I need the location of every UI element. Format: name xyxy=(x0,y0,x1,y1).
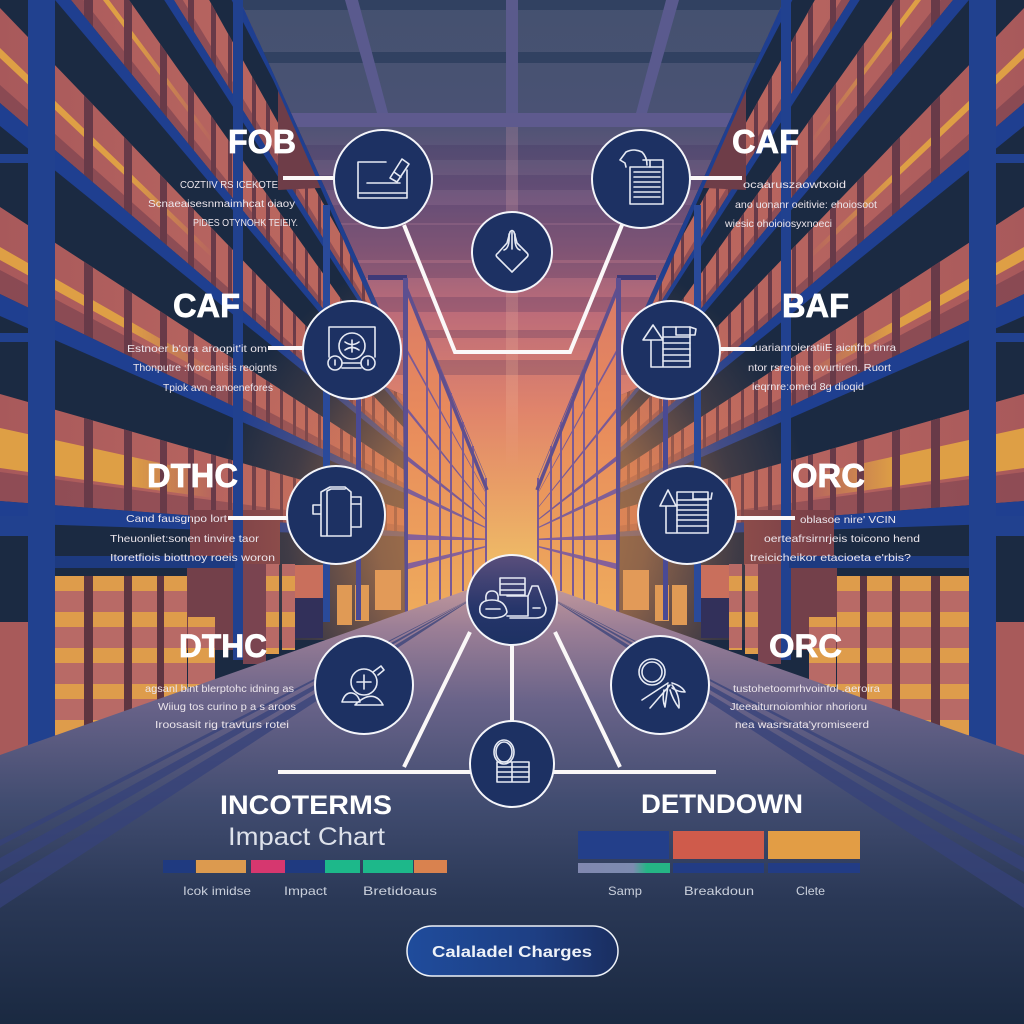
icon: ring and leaves xyxy=(611,636,709,734)
node: FOB xyxy=(148,123,432,229)
warehouse floor xyxy=(0,583,1024,1024)
bar labels: Bretidoaus xyxy=(363,884,437,898)
description: CAF: wiesic ohoioiosyxnoeci xyxy=(724,218,832,230)
description: FOB: COZTIIV RS ICEKOTE xyxy=(180,179,278,191)
breakdown labels: Clete xyxy=(796,884,825,898)
heading: BAF: BAF xyxy=(782,287,849,324)
description: BAF: ntor rsreoine ovurtiren. Ruort xyxy=(748,362,891,374)
description: ORC lower: nea wasrsrata'yromiseerd xyxy=(735,719,869,731)
heading: FOB: FOB xyxy=(228,123,296,160)
description: CAF xyxy=(724,179,877,230)
node: DTHC xyxy=(110,457,385,564)
description: DTHC lower: agsanl bint blerptohc idning as xyxy=(145,683,294,695)
description: CAF: ano uonanr oeitivie: ehoiosoot xyxy=(735,199,877,211)
description: CAF: ocaaruszaowtxoid xyxy=(743,179,846,191)
description: FOB: PIDES OTYNOHK TEIEIY. xyxy=(193,217,298,229)
description: ORC: treicicheikor etacioeta e'rbis? xyxy=(750,552,911,564)
heading: CAF: CAF xyxy=(173,287,240,324)
right warehouse shelving wall xyxy=(512,0,1024,780)
breakdown labels: Breakdoun xyxy=(684,884,754,898)
description: DTHC lower: Iroosasit rig travturs rotei xyxy=(155,719,289,731)
description: ORC lower xyxy=(730,683,880,731)
panel: Incoterms impact chart xyxy=(163,790,447,898)
heading: DTHC: DTHC xyxy=(179,628,267,664)
bar labels: Impact xyxy=(284,884,328,898)
description: DTHC: Cand fausgnpo lort xyxy=(126,513,227,525)
description: ORC xyxy=(750,514,920,564)
heading: DTHC: DTHC xyxy=(147,457,238,494)
description: DTHC xyxy=(110,513,275,564)
description: ORC: oblasoe nire' VCIN xyxy=(800,514,896,526)
description: DTHC: Itoretfiois biottnoy roeis woron xyxy=(110,552,275,564)
description: CAF: Estnoer b'ora aroopit'it om xyxy=(127,343,267,355)
node: bottom center chart icon xyxy=(470,721,554,807)
icon: document with cap xyxy=(592,130,690,228)
description: BAF: ieqrnre:omed 8g dioqid xyxy=(752,381,864,393)
icon: currency cart xyxy=(303,301,401,399)
left warehouse shelving wall xyxy=(0,0,512,780)
button: calculate charges: Calaladel Charges xyxy=(432,944,592,961)
description: CAF: Thonputre :fvorcanisis reoignts xyxy=(133,362,277,374)
bar labels xyxy=(183,884,437,898)
node: center shipment hub xyxy=(467,555,557,645)
description: DTHC lower xyxy=(145,683,296,731)
description: DTHC: Theuonliet:sonen tinvire taor xyxy=(110,533,260,545)
stacked color bar xyxy=(163,860,447,873)
background: warehouse ceiling and glowing sky xyxy=(0,0,1024,640)
description: BAF: uarianroieratiiE aicnfrb tinra xyxy=(755,342,896,354)
button: calculate charges xyxy=(407,926,618,976)
node: BAF xyxy=(622,287,896,399)
description: FOB xyxy=(148,179,298,229)
description: ORC lower: tustohetoomrhvoinfol .aeroira xyxy=(733,683,880,695)
lower front-facing cartons xyxy=(0,560,401,762)
icon: coin and hands xyxy=(315,636,413,734)
bar labels: Icok imidse xyxy=(183,884,251,898)
breakdown labels: Samp xyxy=(608,884,642,898)
node: ORC lower xyxy=(611,628,880,734)
breakdown labels xyxy=(608,884,825,898)
connector lines xyxy=(228,178,795,772)
heading: ORC: ORC xyxy=(769,628,842,664)
heading: CAF: CAF xyxy=(732,123,799,160)
vertical steel posts xyxy=(0,0,361,750)
node: CAF top right xyxy=(592,123,877,230)
node: DTHC lower xyxy=(145,628,413,734)
description: ORC lower: Jteeaiturnoiomhior nhorioru xyxy=(730,701,867,713)
heading: ORC: ORC xyxy=(792,457,865,494)
node: CAF left xyxy=(127,287,401,399)
panel: Detndown breakdown xyxy=(578,789,860,898)
node: center top diamond xyxy=(472,212,552,292)
icon: container xyxy=(287,466,385,564)
description: CAF xyxy=(127,343,277,394)
description: BAF xyxy=(748,342,896,393)
heading: DETNDOWN: DETNDOWN xyxy=(641,789,803,819)
heading: INCOTERMS: INCOTERMS xyxy=(220,790,392,820)
icon: arrow and document xyxy=(622,301,720,399)
subheading: Impact Chart: Impact Chart xyxy=(228,823,385,851)
icon: arrow and ledger xyxy=(638,466,736,564)
description: DTHC lower: Wiiug tos curino p a s aroos xyxy=(158,701,296,713)
node: ORC xyxy=(638,457,920,564)
description: CAF: Tpiok avn eanoenefores xyxy=(163,382,273,394)
description: FOB: Scnaeaisesnmaimhcat oiaoy xyxy=(148,198,296,210)
icon: form and pen xyxy=(334,130,432,228)
breakdown color blocks xyxy=(578,831,860,873)
description: ORC: oerteafrsirnrjeis toicono hend xyxy=(764,533,920,545)
